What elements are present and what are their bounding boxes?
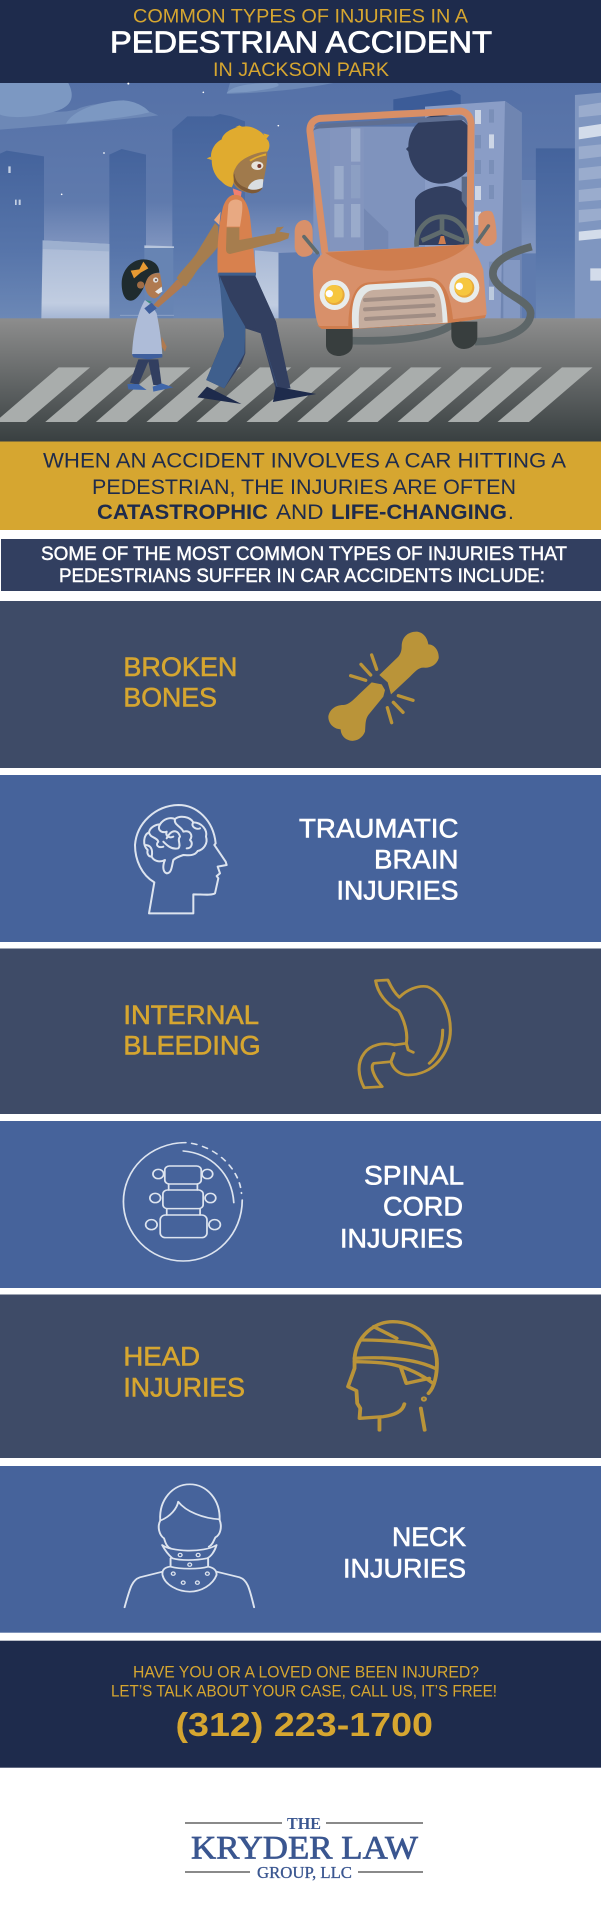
subheading text: PEDESTRIANS SUFFER IN CAR ACCIDENTS INCLUDE: bbox=[59, 565, 545, 587]
wheels bbox=[326, 322, 477, 356]
girl bbox=[122, 259, 187, 392]
windshield frame bbox=[310, 111, 471, 253]
label bbox=[123, 1000, 261, 1061]
intro text: AND bbox=[276, 501, 324, 524]
title line 2: PEDESTRIAN ACCIDENT bbox=[110, 26, 492, 60]
panel: internal bleeding bbox=[0, 948, 601, 1114]
road bbox=[0, 318, 601, 442]
label: NECK bbox=[392, 1522, 466, 1552]
intro text: WHEN AN ACCIDENT INVOLVES A CAR HITTING A bbox=[43, 450, 566, 473]
label: INJURIES bbox=[340, 1223, 463, 1253]
label: SPINAL bbox=[364, 1161, 464, 1191]
car body bbox=[313, 244, 487, 328]
clouds and left buildings bbox=[0, 83, 333, 319]
label: BRAIN bbox=[374, 845, 458, 875]
intro text: . bbox=[508, 501, 514, 524]
steering wheel bbox=[417, 217, 467, 247]
logo: The Kryder Law Group, LLC: GROUP, LLC bbox=[257, 1863, 352, 1882]
intro text bbox=[43, 450, 566, 524]
subheading text bbox=[41, 543, 567, 587]
subheading band bbox=[1, 539, 601, 591]
label: INJURIES bbox=[343, 1554, 466, 1584]
label bbox=[123, 1342, 245, 1403]
label: TRAUMATIC bbox=[299, 814, 458, 844]
intro text: CATASTROPHIC bbox=[97, 501, 268, 524]
gold intro band bbox=[0, 442, 601, 530]
title line 3: IN JACKSON PARK bbox=[213, 59, 389, 81]
label: BROKEN bbox=[123, 652, 237, 682]
icon: spine in circle bbox=[123, 1143, 242, 1261]
right buildings bbox=[313, 90, 536, 318]
phone number: (312) 223-1700 bbox=[176, 1706, 433, 1743]
man legs and shoes bbox=[197, 275, 316, 404]
title banner bbox=[0, 0, 601, 83]
logo: The Kryder Law Group, LLC bbox=[185, 1814, 423, 1882]
label: INJURIES bbox=[336, 876, 458, 906]
panel: neck injuries bbox=[0, 1466, 601, 1633]
call to action text: HAVE YOU OR A LOVED ONE BEEN INJURED? bbox=[133, 1663, 479, 1682]
call to action text: LET’S TALK ABOUT YOUR CASE, CALL US, IT’S FREE! bbox=[111, 1682, 497, 1701]
label bbox=[123, 652, 237, 713]
label bbox=[343, 1522, 466, 1584]
car bbox=[295, 111, 532, 356]
panel: traumatic brain injuries bbox=[0, 775, 601, 942]
icon: broken bone bbox=[328, 632, 439, 741]
label bbox=[299, 814, 458, 906]
label bbox=[340, 1161, 464, 1253]
tall right buildings bbox=[536, 148, 575, 318]
label: INTERNAL bbox=[123, 1000, 259, 1030]
label: HEAD bbox=[123, 1342, 200, 1372]
logo: The Kryder Law Group, LLC: THE bbox=[287, 1814, 321, 1833]
intro text: PEDESTRIAN, THE INJURIES ARE OFTEN bbox=[92, 476, 516, 499]
grille bbox=[352, 281, 448, 328]
headlights bbox=[320, 280, 350, 310]
subheading text: SOME OF THE MOST COMMON TYPES OF INJURIES THAT bbox=[41, 543, 567, 565]
man bbox=[177, 125, 316, 404]
call to action text bbox=[111, 1663, 497, 1701]
crosswalk bbox=[0, 367, 593, 422]
title line 1: COMMON TYPES OF INJURIES IN A bbox=[133, 6, 468, 28]
intro text: LIFE-CHANGING bbox=[331, 501, 507, 524]
driver silhouette bbox=[406, 115, 469, 245]
icon: bandaged head bbox=[348, 1322, 437, 1430]
panel: spinal cord injuries bbox=[0, 1121, 601, 1288]
label: BLEEDING bbox=[123, 1031, 261, 1061]
call to action footer bbox=[0, 1641, 601, 1768]
icon: neck brace bbox=[125, 1484, 254, 1607]
panel: head injuries bbox=[0, 1294, 601, 1458]
label: BONES bbox=[123, 683, 217, 713]
man back arm bbox=[177, 223, 218, 286]
logo: The Kryder Law Group, LLC: KRYDER LAW bbox=[191, 1831, 419, 1867]
label: INJURIES bbox=[123, 1373, 245, 1403]
man torso and head bbox=[207, 125, 289, 276]
label: CORD bbox=[383, 1192, 463, 1222]
icon: head with brain bbox=[135, 805, 227, 913]
icon: stomach bbox=[359, 980, 450, 1088]
mirrors bbox=[295, 220, 313, 257]
illustration: pedestrians and car in city street bbox=[0, 83, 601, 442]
skid mark bbox=[352, 247, 532, 342]
panel: broken bones bbox=[0, 601, 601, 768]
